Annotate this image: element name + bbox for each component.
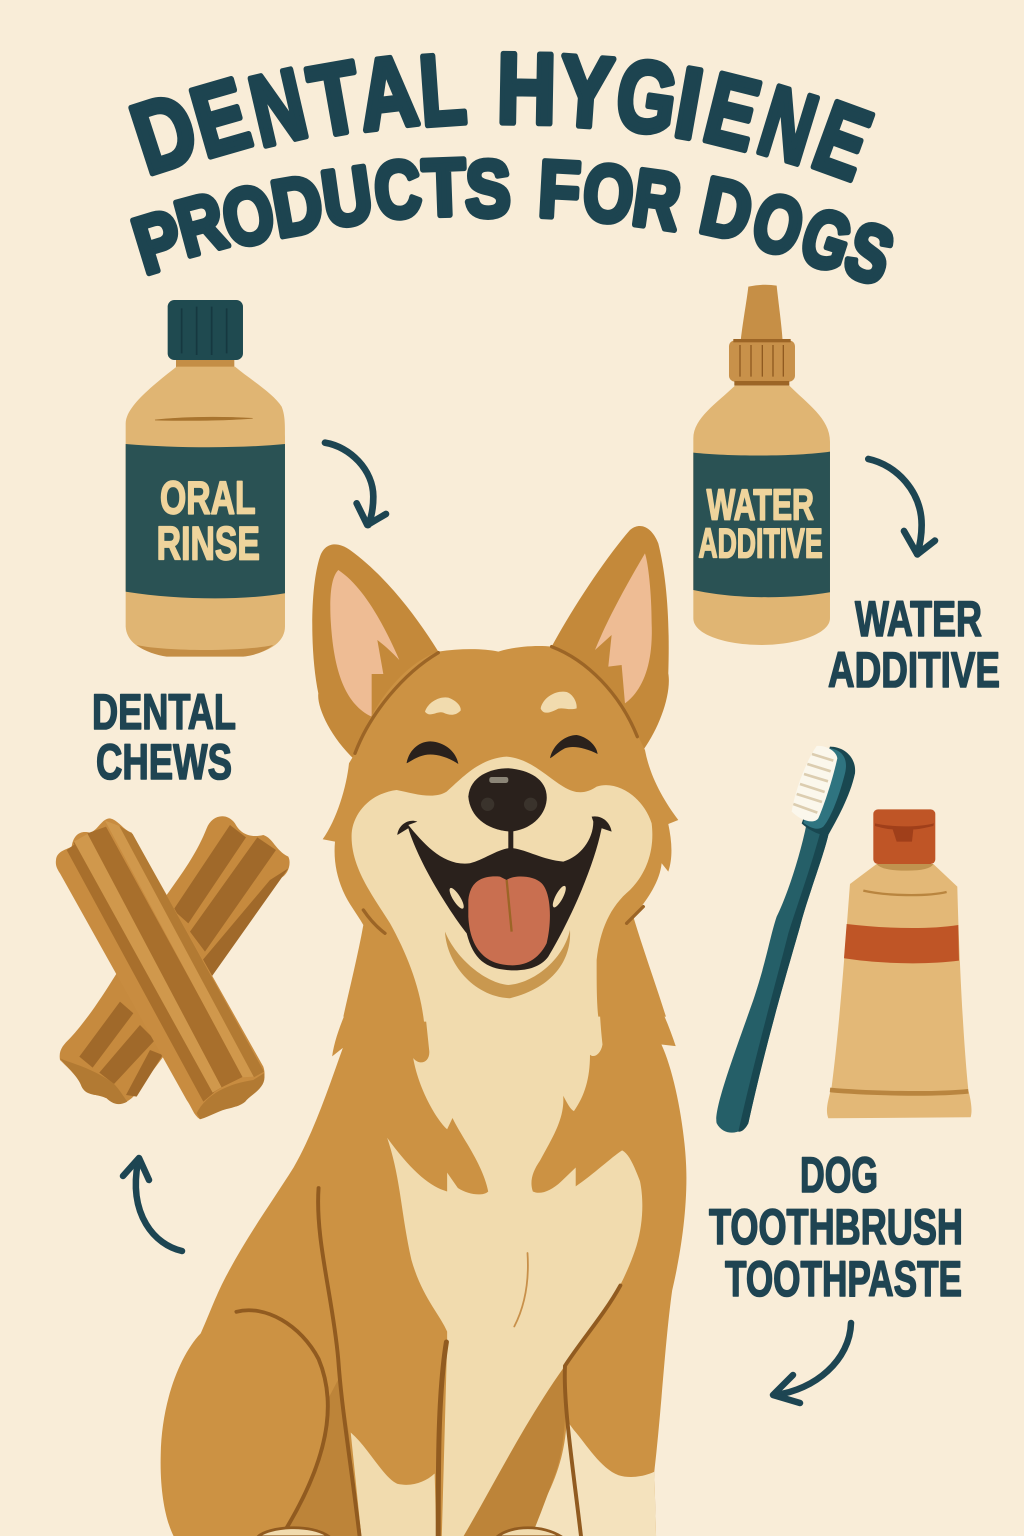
label text: water additive: WATER: [707, 481, 814, 529]
left brow: [425, 697, 461, 715]
dog body: [161, 966, 686, 1536]
title line 2: R: [628, 153, 686, 248]
label: dental chews: [92, 684, 236, 790]
belly shadow: [461, 1366, 566, 1536]
title line 2: R: [167, 176, 235, 274]
cap: [168, 300, 243, 360]
title line 2: U: [317, 149, 378, 244]
nozzle: [741, 285, 783, 341]
title line 2: G: [791, 190, 862, 289]
title line 2: D: [265, 158, 329, 254]
handle: [716, 823, 828, 1133]
dog: [161, 526, 686, 1536]
arrow: oral rinse to dog: [325, 443, 386, 525]
right tooth: [550, 884, 568, 909]
title line 1: [119, 32, 884, 202]
bottle label: [126, 444, 285, 598]
title line 1: G: [610, 38, 684, 156]
brush head: [802, 747, 855, 835]
shoulder crease: [155, 417, 253, 420]
left paw: [258, 1528, 329, 1536]
label text: water additive: [698, 481, 823, 567]
dental chews: [56, 816, 290, 1119]
title line 2: C: [371, 143, 425, 237]
nose: [468, 768, 547, 832]
haunch shadow: [286, 1376, 360, 1536]
toothbrush: [716, 746, 855, 1133]
left tooth: [447, 886, 466, 910]
label text: oral rinse: ORAL: [160, 471, 256, 523]
title line 1: N: [241, 48, 316, 168]
title line 2: P: [123, 192, 193, 291]
back chew: [60, 816, 290, 1104]
title line 1: H: [496, 33, 557, 145]
left leg: [351, 1432, 436, 1536]
handle shadow: [738, 833, 828, 1132]
bottle label: [693, 452, 830, 597]
bottle body: [693, 386, 830, 645]
title line 2: [123, 142, 904, 303]
title line 2: D: [693, 160, 760, 258]
arrow: water additive: [868, 459, 935, 554]
ear base lines: [355, 647, 643, 933]
title line 2: T: [421, 142, 467, 233]
head shape: [323, 646, 678, 1017]
arrow: dental chews: [123, 1158, 182, 1251]
title line 1: Y: [556, 35, 617, 150]
bottle neck: [176, 357, 234, 369]
bottle base shadow: [137, 645, 273, 657]
tube cap: [873, 809, 935, 864]
front chew: [56, 818, 265, 1119]
title line 1: E: [695, 51, 770, 172]
oral rinse bottle: [126, 300, 285, 657]
arrow: toothbrush and toothpaste: [773, 1323, 851, 1403]
muzzle and neck: [352, 757, 652, 1022]
right ear: [552, 526, 669, 750]
collar: [729, 339, 795, 386]
title line 1: N: [747, 65, 828, 186]
tongue: [468, 876, 550, 965]
label text: oral rinse: RINSE: [157, 517, 260, 570]
toothpaste tube: [827, 809, 972, 1118]
title line 1: A: [352, 35, 423, 152]
label: water additive: [828, 591, 1000, 698]
label: dental chews: DENTAL: [92, 684, 236, 740]
bottle body: [126, 367, 285, 656]
title line 1: E: [180, 58, 261, 180]
title line 1: T: [301, 41, 369, 159]
jaw crease: [445, 930, 570, 998]
dog head: [312, 526, 678, 1022]
title line 2: S: [465, 144, 511, 233]
title line 1: L: [416, 32, 469, 147]
title line 1: E: [801, 81, 884, 202]
title line 2: O: [580, 147, 637, 241]
tube neck shadow: [877, 864, 933, 871]
label: dental chews: CHEWS: [96, 734, 232, 790]
label: dog toothbrush toothpaste: [709, 1147, 963, 1307]
tube crease: [863, 891, 947, 895]
fur lines: [236, 1188, 620, 1536]
label: dog toothbrush toothpaste: DOG: [800, 1147, 878, 1203]
title line 1: D: [119, 72, 210, 196]
water additive bottle: [693, 285, 830, 645]
body silhouette: [161, 966, 686, 1536]
mouth: [397, 816, 612, 970]
label text: water additive: ADDITIVE: [698, 521, 823, 567]
tube band: [844, 924, 959, 963]
right paw: [497, 1528, 561, 1536]
bristles: [792, 746, 837, 821]
title line 2: F: [536, 144, 583, 235]
title: [119, 32, 904, 303]
left eye: [407, 741, 458, 764]
tube crimp: [830, 1090, 968, 1093]
right leg: [529, 1421, 656, 1536]
title line 2: O: [215, 168, 282, 265]
label text: oral rinse: [157, 471, 260, 570]
left ear: [312, 544, 438, 760]
chest fur: [387, 966, 642, 1536]
right brow: [541, 692, 577, 713]
tube body: [827, 864, 972, 1118]
title line 2: O: [743, 176, 812, 275]
right eye: [550, 735, 598, 758]
title line 1: I: [668, 46, 710, 160]
title line 2: S: [834, 205, 904, 303]
